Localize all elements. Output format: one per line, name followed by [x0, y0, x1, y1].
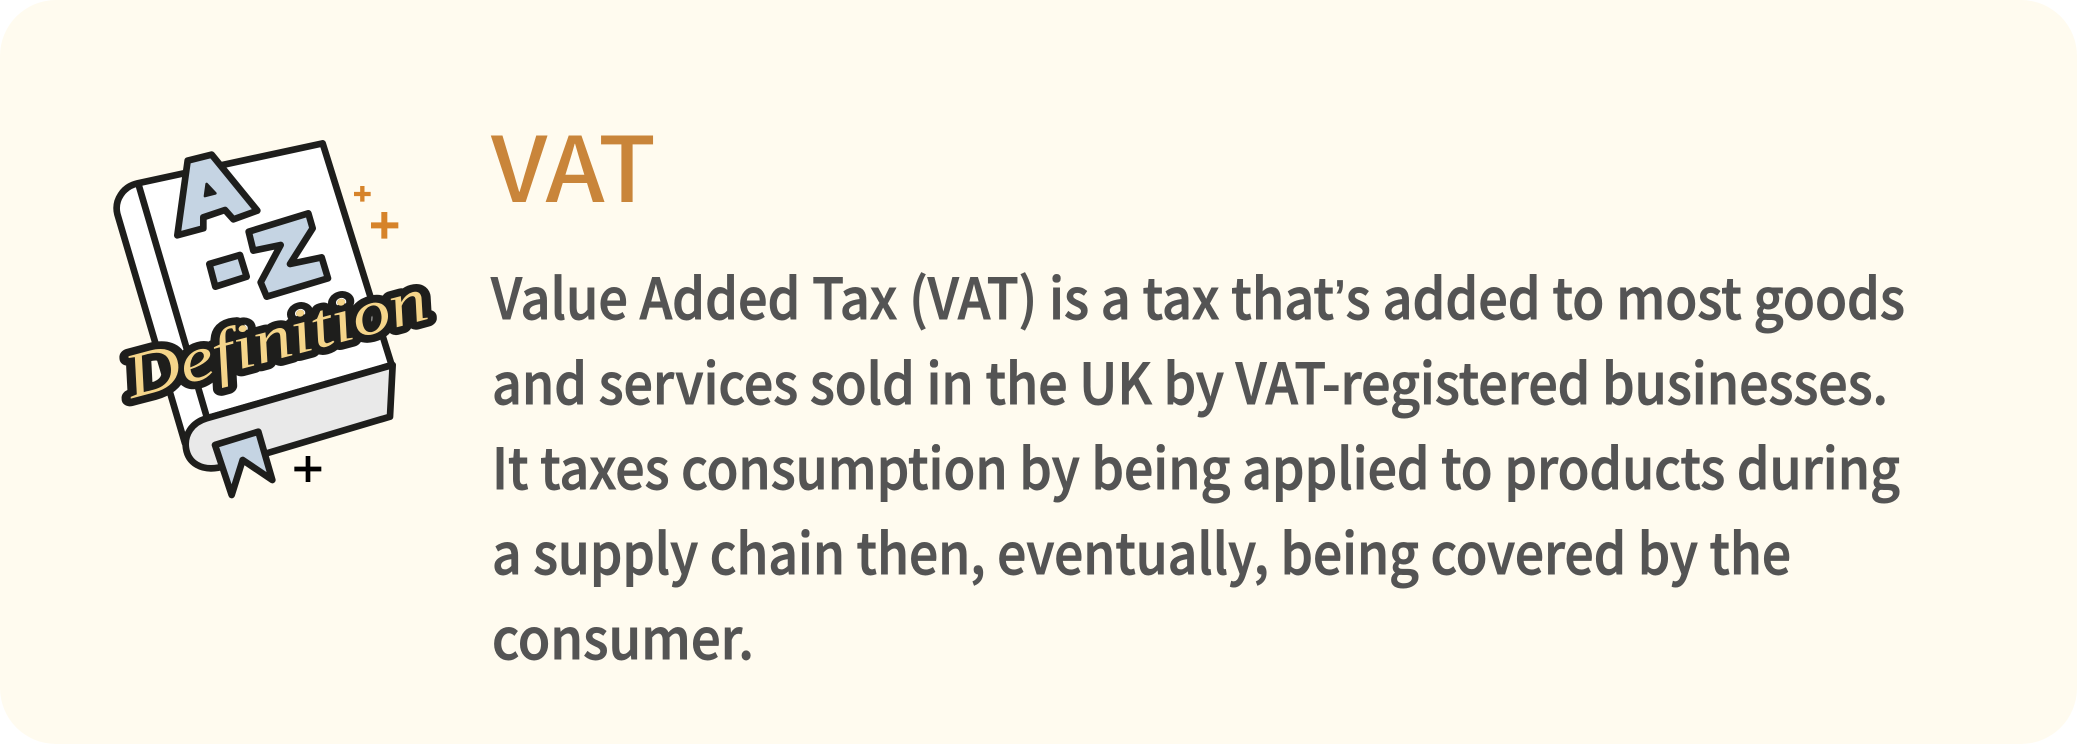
icon part: Definition lettering: Definition	[116, 264, 435, 412]
icon part: letter A	[177, 155, 257, 235]
text block: VAT definition: consumer.	[492, 595, 754, 676]
icon part: bookmark	[215, 432, 272, 495]
text block: VAT definition: and services sold in the UK by VAT-registered businesses.	[492, 340, 1888, 421]
icon: black plus	[294, 456, 321, 482]
icon part: pages band	[186, 365, 393, 468]
icon: A-Z definition book	[116, 143, 435, 495]
icon part: dash	[209, 255, 247, 287]
text block: VAT definition: It taxes consumption by being applied to products during	[492, 425, 1900, 506]
icon part: spine line	[139, 185, 207, 417]
text block: VAT definition: Value Added Tax (VAT) is a tax that’s added to most goods	[490, 255, 1905, 336]
icon part: letter Z	[249, 213, 328, 297]
text block: VAT definition	[490, 255, 1905, 676]
icon part: Definition lettering: Definition	[116, 264, 435, 412]
icon: small orange plus	[354, 186, 371, 202]
text block: VAT definition: a supply chain then, eventually, being covered by the	[492, 510, 1791, 591]
heading: VAT: VAT	[490, 98, 656, 228]
icon part: book cover	[117, 143, 392, 443]
icon: large orange plus	[371, 212, 398, 239]
